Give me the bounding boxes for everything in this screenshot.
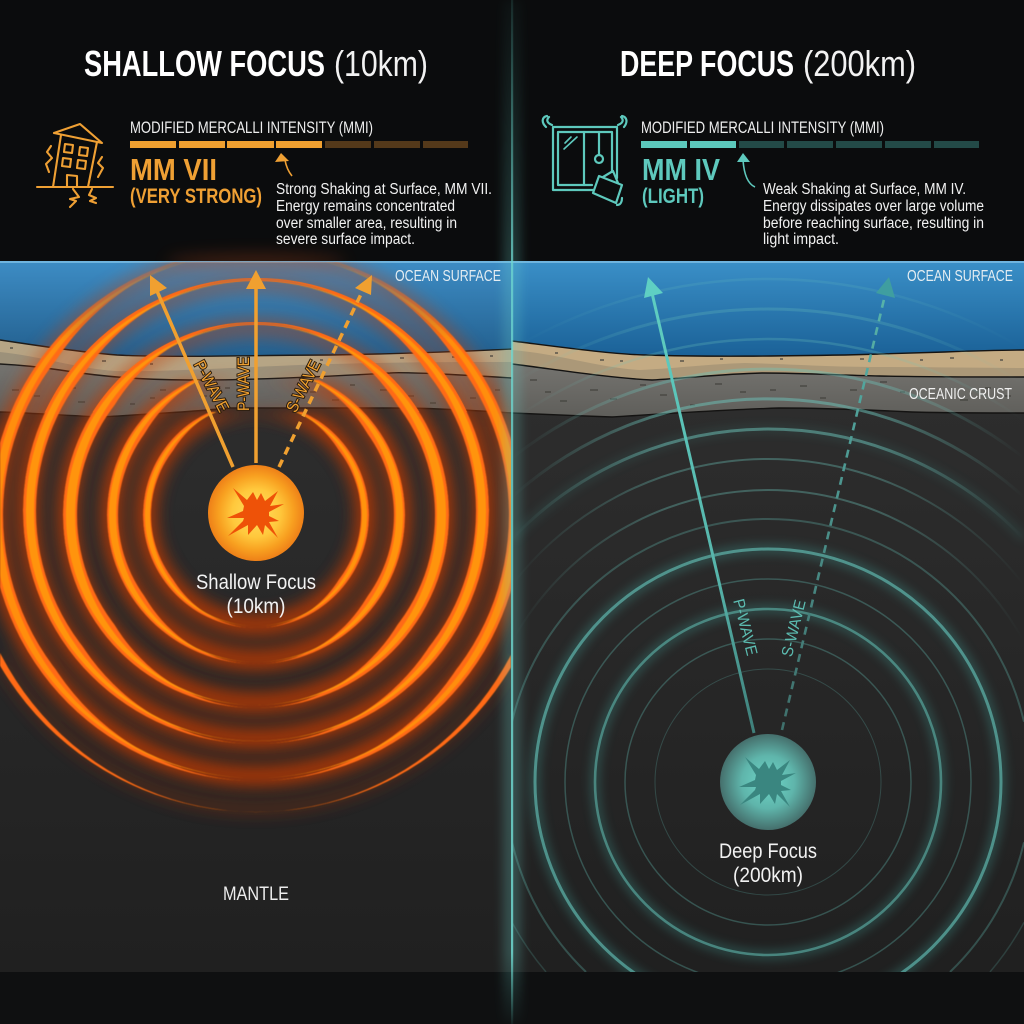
deep description: Weak Shaking at Surface, MM IV. — [763, 181, 966, 198]
shallow focus label: (10km) — [226, 595, 286, 618]
arrow: P-wave center — [246, 270, 266, 463]
title suffix: 10km: (10km) — [334, 43, 428, 84]
light label: (LIGHT) — [642, 184, 704, 208]
inner teal rings — [512, 519, 1024, 1015]
title suffix: 200km: (200km) — [803, 43, 916, 84]
arrow: P-wave left — [150, 275, 233, 467]
arrow: P-wave — [644, 277, 754, 733]
ring 6 — [0, 652, 511, 813]
right ocean layer — [512, 262, 1024, 372]
deep description: before reaching surface, resulting in — [763, 215, 984, 232]
ocean surface highlight line — [0, 261, 1024, 263]
panel: shallow focus cross-section — [0, 262, 512, 972]
ring 4 — [23, 278, 489, 744]
panel: deep focus cross-section — [512, 262, 1024, 972]
shallow description — [276, 181, 492, 248]
shallow intensity block — [130, 119, 492, 248]
deep wave arrows — [644, 277, 895, 733]
arrow: S-wave dashed — [279, 275, 372, 467]
right rock speckles — [530, 353, 1011, 405]
intensity scale bars — [130, 141, 468, 148]
label: P-wave left: P-WAVE — [190, 358, 232, 415]
shallow focus point — [208, 465, 304, 561]
bottom dark band — [0, 972, 1024, 1024]
ring 2 — [107, 366, 405, 664]
icon: rattling window — [543, 116, 626, 205]
outer fading teal rings — [530, 278, 1008, 608]
icon: shaking house — [37, 124, 113, 207]
shallow wave arrows — [150, 270, 372, 467]
label: P-wave: P-WAVE — [729, 597, 760, 658]
orange glow above the surface — [166, 254, 346, 270]
thin top arcs through the ocean — [45, 278, 467, 412]
shallow description: Energy remains concentrated — [276, 198, 455, 215]
seismic ring crescents — [0, 262, 511, 813]
deep focus label — [719, 840, 817, 887]
ring 1 — [143, 402, 369, 628]
arrow to scale — [275, 153, 292, 176]
MM VII value: MM VII — [130, 152, 217, 187]
center divider — [503, 0, 521, 1024]
ring 5 — [0, 249, 522, 781]
label: S-wave: S-WAVE — [779, 598, 810, 659]
shallow description: over smaller area, resulting in — [276, 215, 457, 232]
deep focus point — [720, 734, 816, 830]
deep focus label: (200km) — [733, 864, 803, 887]
deep description: light impact. — [763, 231, 839, 248]
deep focus seismic rings — [512, 279, 1024, 1015]
ring glow — [0, 262, 511, 821]
left mantle layer — [0, 408, 512, 972]
ring 3 — [63, 322, 449, 708]
label: P-wave center: P-WAVE — [235, 357, 253, 411]
right mantle layer — [512, 408, 1024, 972]
MM IV value: MM IV — [642, 152, 720, 187]
left crust layer — [0, 364, 512, 417]
left lower sand band — [0, 352, 512, 380]
left rock speckles — [10, 348, 500, 404]
shallow focus seismic rings — [0, 262, 511, 821]
deep focus label: Deep Focus — [719, 840, 817, 863]
intensity scale bars — [641, 141, 979, 148]
shallow description: Strong Shaking at Surface, MM VII. — [276, 181, 492, 198]
MMI scale heading: MODIFIED MERCALLI INTENSITY (MMI) — [641, 119, 884, 137]
left sand layer — [0, 340, 512, 380]
right crust layer — [512, 364, 1024, 417]
very strong label: (VERY STRONG) — [130, 184, 262, 208]
layer label: ocean surface left: OCEAN SURFACE — [395, 268, 501, 285]
right lower sand band — [512, 350, 1024, 380]
label: S-wave: S-WAVE — [283, 357, 325, 415]
left strata lines — [0, 340, 512, 417]
teal ring glow — [512, 429, 1024, 1015]
left ocean layer — [0, 262, 512, 372]
right strata lines — [512, 341, 1024, 417]
shallow focus label — [196, 571, 316, 618]
arrow to scale — [737, 153, 755, 187]
deep description: Energy dissipates over large volume — [763, 198, 984, 215]
MMI scale heading: MODIFIED MERCALLI INTENSITY (MMI) — [130, 119, 373, 137]
arrow: S-wave dashed — [782, 277, 895, 730]
right sand layer — [512, 341, 1024, 380]
title: deep focus: DEEP FOCUS — [620, 43, 794, 84]
layer label: mantle: MANTLE — [223, 883, 289, 905]
deep description — [763, 181, 984, 248]
deep intensity block — [641, 119, 984, 248]
title: shallow focus: SHALLOW FOCUS — [84, 43, 325, 84]
shallow focus label: Shallow Focus — [196, 571, 316, 594]
shallow description: severe surface impact. — [276, 231, 415, 248]
